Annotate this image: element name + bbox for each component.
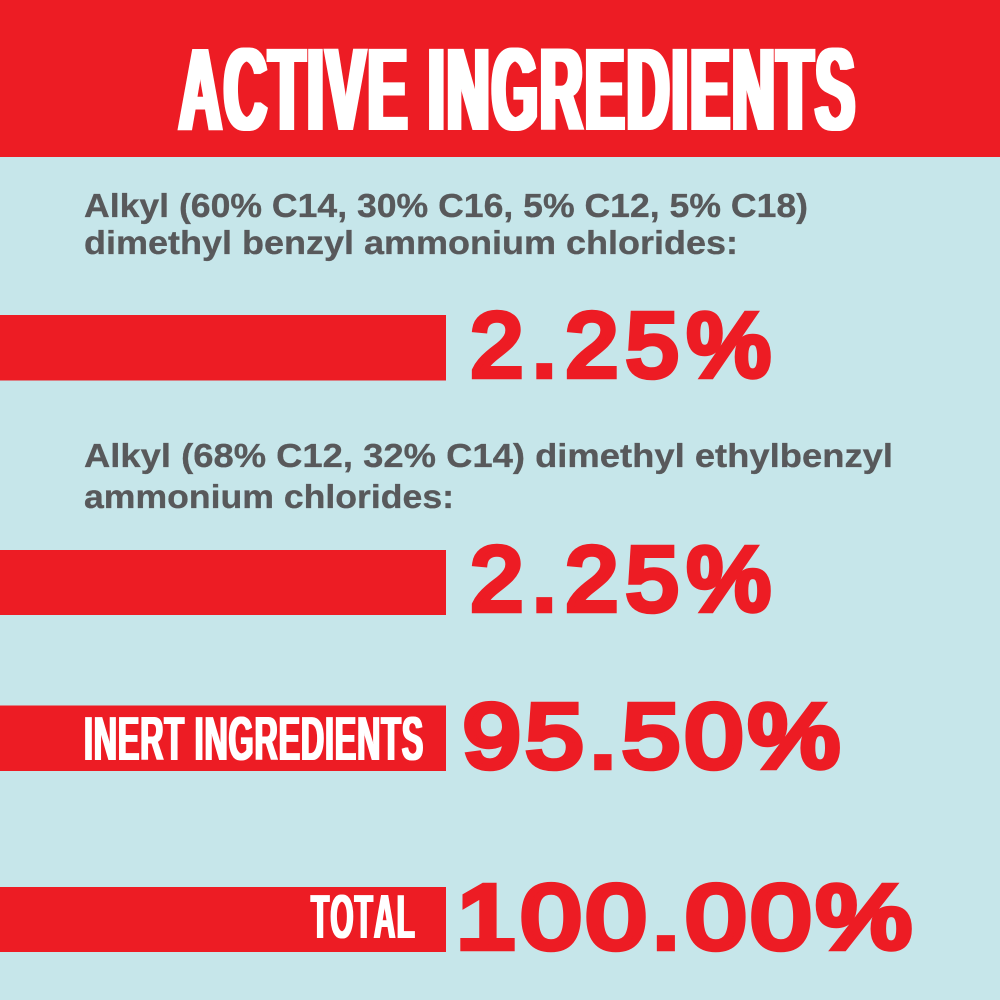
ingredient 1 description: Alkyl (60% C14, 30% C16, 5% C12, 5% C18) (84, 187, 808, 224)
header band with title: ACTIVE INGREDIENTS (179, 24, 857, 155)
header band with title (0, 0, 1000, 157)
ingredient 2 bar (0, 550, 446, 615)
total bar with label (0, 883, 446, 952)
inert ingredients bar with label: INERT INGREDIENTS (84, 705, 424, 774)
ingredient 1 percentage: 2.25% (470, 294, 779, 396)
ingredient 1 description: dimethyl benzyl ammonium chlorides: (84, 224, 738, 261)
ingredient 2 percentage: 2.25% (470, 528, 779, 630)
total percentage: 100.00% (456, 867, 917, 968)
total bar with label: TOTAL (311, 883, 416, 952)
ingredient 2 description: ammonium chlorides: (84, 478, 454, 515)
inert ingredients percentage: 95.50% (463, 685, 845, 786)
ingredient 2 description (84, 437, 893, 515)
ingredient 1 description (84, 187, 808, 261)
ingredient 1 bar (0, 315, 446, 380)
ingredient 2 description: Alkyl (68% C12, 32% C14) dimethyl ethylbenzyl (84, 437, 893, 474)
